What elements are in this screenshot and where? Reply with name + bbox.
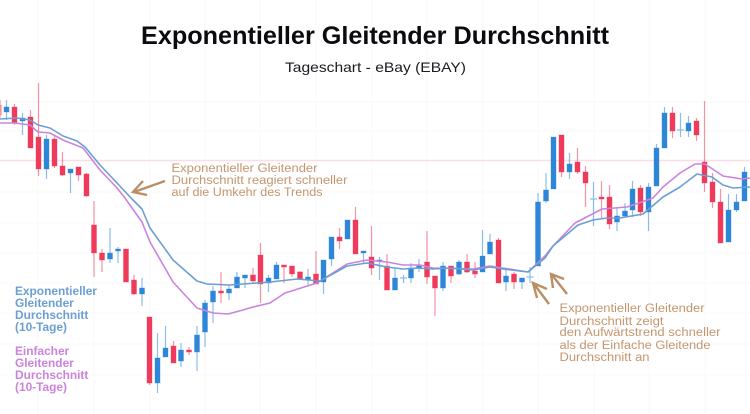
annotation: uptrend: Exponentieller Gleitender	[560, 303, 705, 315]
legend: simple moving average: Gleitender	[15, 356, 74, 370]
arrow: lower upward signal	[533, 283, 549, 304]
legend: simple moving average: Einfacher	[15, 344, 70, 358]
annotation: uptrend: Durchschnitt an	[560, 352, 650, 364]
annotation: trend reversal: auf die Umkehr des Trends	[172, 187, 323, 199]
annotation: trend reversal: Exponentieller Gleitender	[172, 163, 318, 175]
title: Exponentieller Gleitender Durchschnitt	[141, 22, 610, 50]
arrow: trend reversal	[133, 181, 165, 195]
arrow: upper upward signal	[551, 274, 567, 294]
annotation: uptrend: den Aufwärtstrend schneller	[560, 327, 721, 339]
legend: exponential moving average: Durchschnitt	[15, 308, 88, 322]
legend: exponential moving average: Gleitender	[15, 296, 74, 310]
candlestick chart	[0, 83, 747, 393]
legend: simple moving average: Durchschnitt	[15, 368, 88, 382]
line: exponential moving average	[0, 118, 750, 285]
annotation: uptrend: Durchschnitt zeigt	[560, 316, 664, 328]
legend: simple moving average: (10-Tage)	[15, 380, 67, 394]
subtitle: Tageschart - eBay (EBAY)	[285, 59, 466, 75]
annotation: trend reversal: Durchschnitt reagiert schneller	[172, 175, 348, 187]
legend: exponential moving average: Exponentieller	[15, 284, 97, 298]
annotation: uptrend: als der Einfache Gleitende	[560, 340, 710, 352]
line: simple moving average	[0, 123, 750, 314]
legend: exponential moving average: (10-Tage)	[15, 320, 67, 334]
